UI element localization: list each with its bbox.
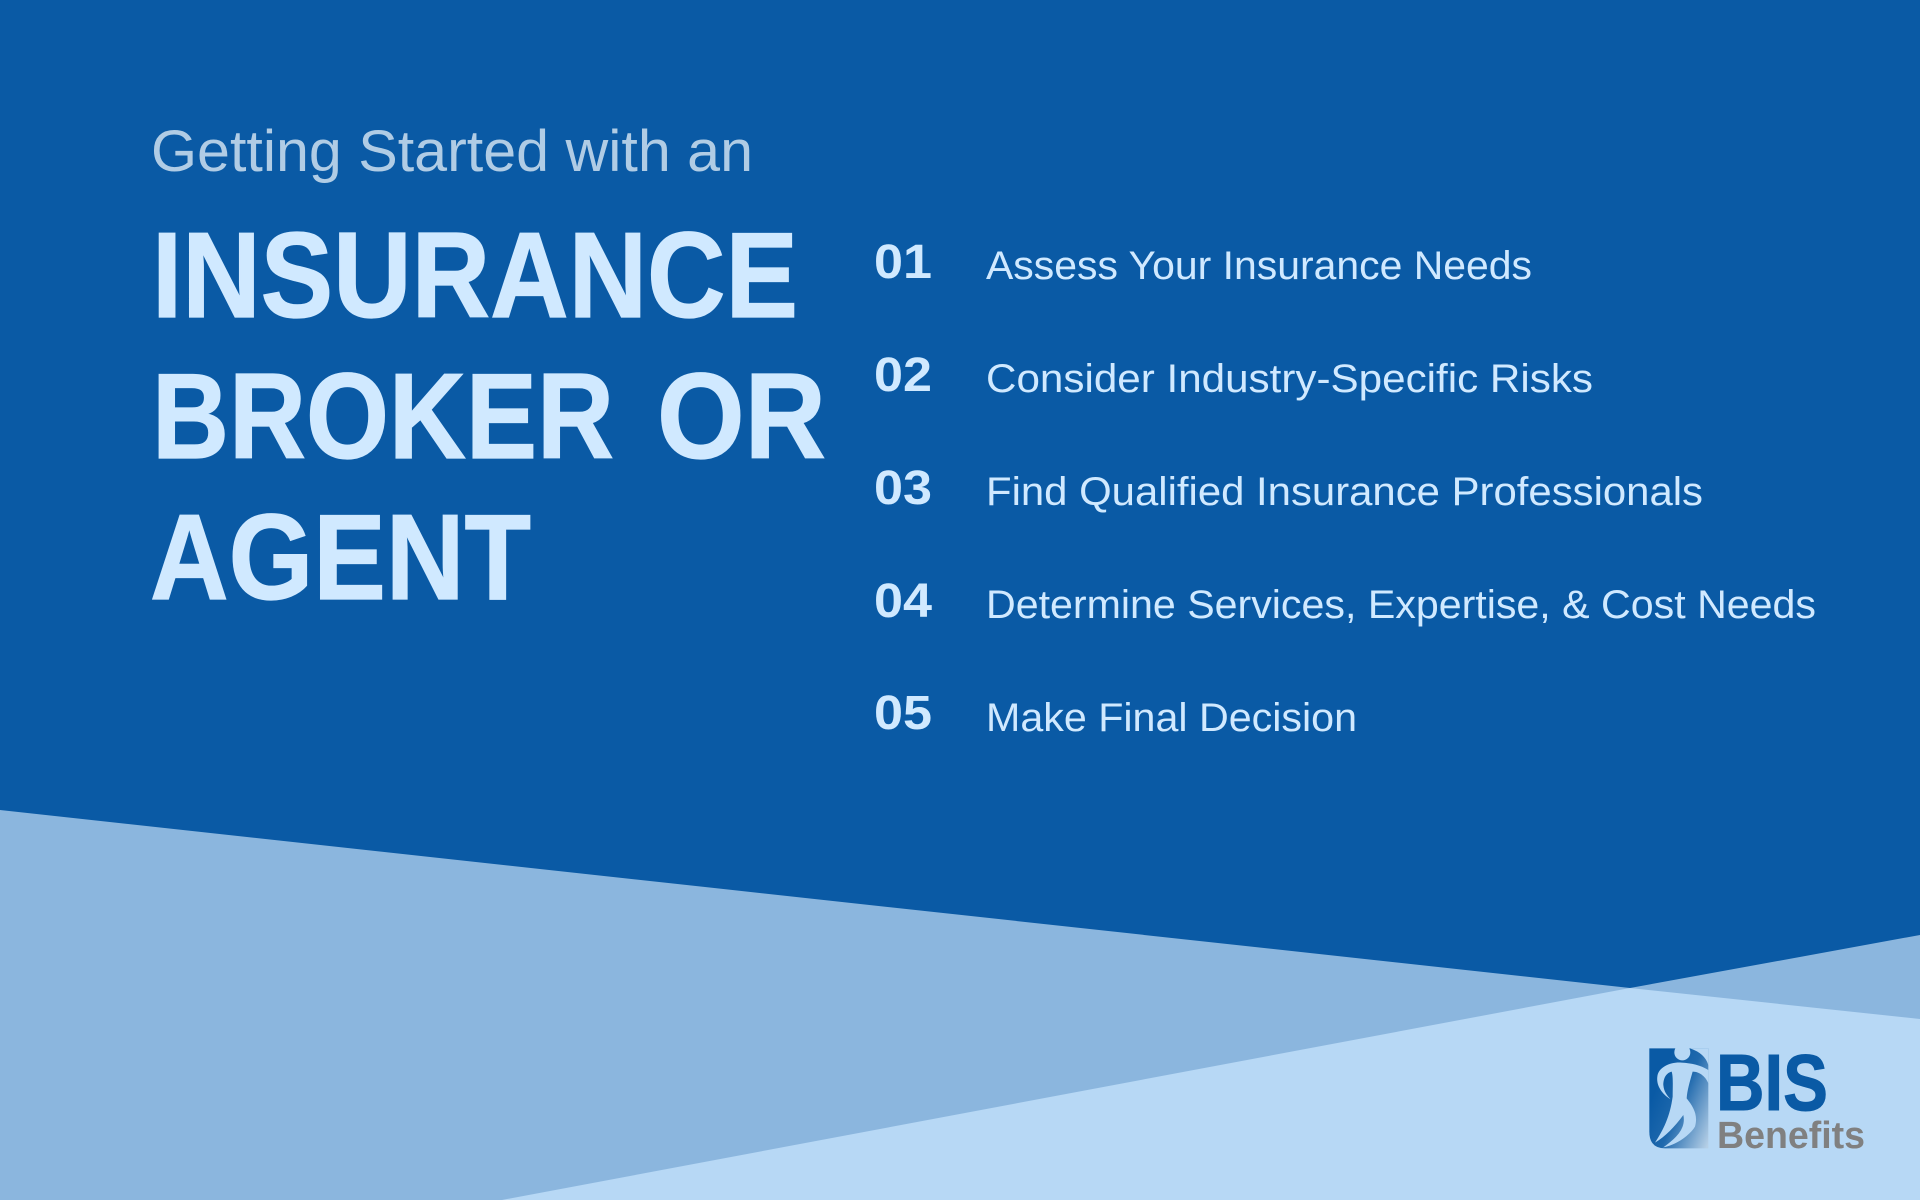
step 03	[874, 462, 1703, 515]
title: OR	[657, 348, 826, 484]
steps list	[874, 236, 1816, 740]
logo wordmark Benefits: Benefits	[1717, 1115, 1865, 1157]
step 04: Determine Services, Expertise, & Cost Needs	[986, 583, 1816, 627]
title: INSURANCE	[152, 207, 798, 343]
logo: BIS Benefits	[1649, 1038, 1865, 1157]
light blue wedge	[502, 988, 1920, 1200]
step 03: 03	[874, 462, 932, 515]
title	[150, 207, 826, 625]
icon: shield with runner	[1649, 1044, 1708, 1148]
step 04: 04	[874, 575, 932, 628]
logo wordmark BIS: BIS	[1716, 1038, 1828, 1127]
step 05	[874, 687, 1357, 740]
step 01: Assess Your Insurance Needs	[986, 244, 1532, 288]
step 05: 05	[874, 687, 932, 740]
step 02: 02	[874, 349, 932, 402]
step 02	[874, 349, 1593, 402]
step 01	[874, 236, 1532, 289]
subtitle: Getting Started with an	[151, 119, 753, 184]
mid blue wedge	[0, 810, 1920, 1200]
title: AGENT	[150, 489, 531, 625]
step 03: Find Qualified Insurance Professionals	[986, 470, 1703, 514]
step 01: 01	[874, 236, 932, 289]
step 05: Make Final Decision	[986, 696, 1357, 740]
title: BROKER	[152, 348, 614, 484]
step 02: Consider Industry-Specific Risks	[986, 357, 1593, 401]
